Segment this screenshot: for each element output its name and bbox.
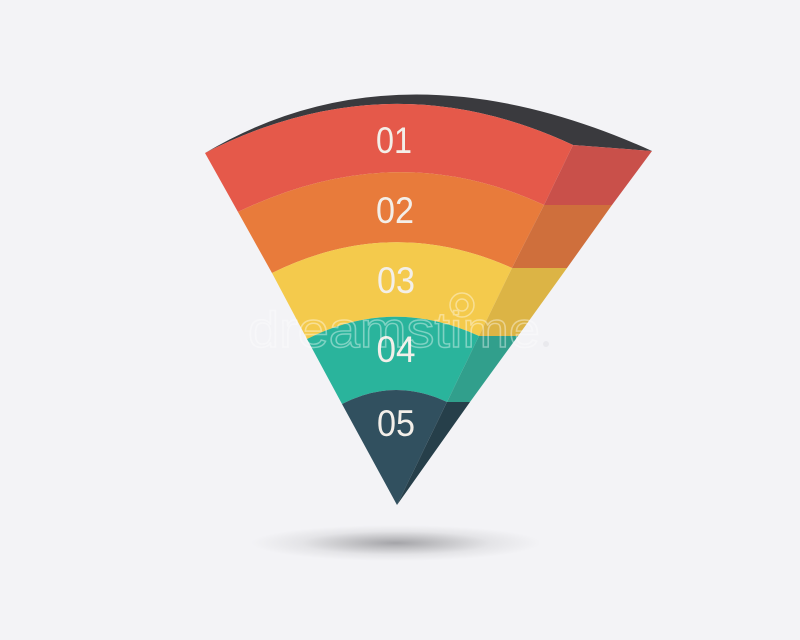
label 03: 03 [377, 260, 415, 301]
label 04: 04 [376, 329, 416, 370]
segment 01 [205, 104, 652, 212]
segment 03 [272, 242, 567, 339]
label 01: 01 [376, 120, 412, 161]
segment 05 [342, 390, 470, 505]
label 02: 02 [376, 190, 414, 231]
segment 04 [307, 317, 518, 404]
top rim [205, 94, 652, 153]
label 05: 05 [377, 403, 415, 444]
segment 02 [238, 172, 612, 273]
watermark: dreamstime [248, 302, 540, 358]
ground shadow [251, 525, 541, 561]
funnel [205, 94, 652, 505]
